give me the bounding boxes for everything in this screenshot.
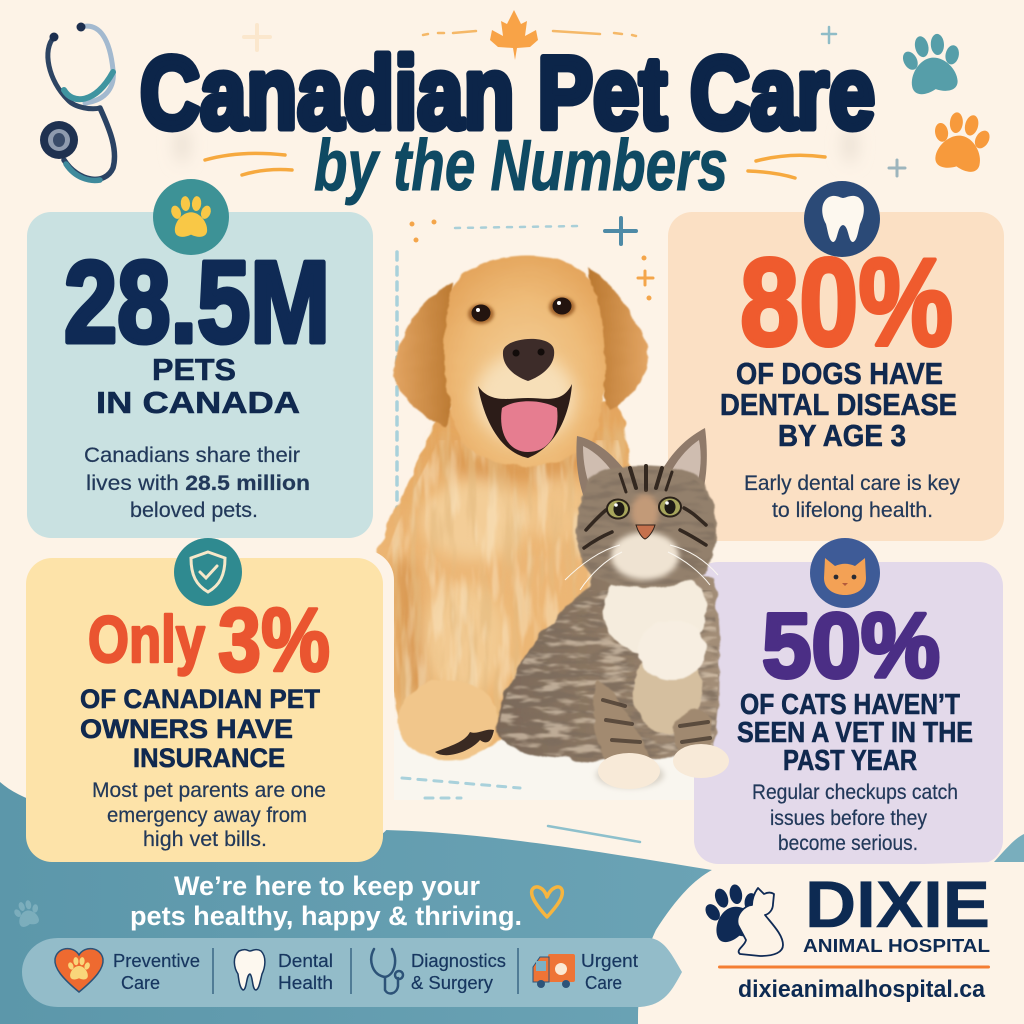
heading: pets in Canada: PETS [152,352,236,387]
icon: teal paw [898,30,966,97]
cat body tabby dark [499,590,718,758]
body text: to lifelong health. [772,499,933,522]
faint paw on teal [11,898,43,929]
cat body [497,560,720,760]
closing message: We’re here to keep your [174,871,480,901]
panel: only 3% insurance [26,538,394,862]
heading: dogs dental disease: DENTAL DISEASE [720,387,957,422]
cat muzzle [611,532,679,580]
icon: paw badge [153,179,229,255]
subtitle: by the Numbers [314,126,728,206]
icon: maple leaf [423,10,636,60]
logo rule [718,966,990,968]
cream logo background [638,862,1024,1024]
dog chest soft highlights [396,440,600,700]
body text [744,472,960,522]
dog fur streaks dark [376,400,632,735]
dog nose [503,339,554,381]
dog paw [398,680,498,760]
body text: Early dental care is key [744,472,960,495]
dog tongue [501,401,558,452]
heading: cats vet: OF CATS HAVEN’T [740,689,960,721]
soft title shadows [175,127,857,163]
dog left ear [393,283,456,426]
heading: dogs dental disease: BY AGE 3 [778,418,906,453]
stat: 28.5M: 28.5M [64,237,330,367]
icon: cat badge [810,538,880,608]
label [113,950,200,993]
dog right ear [588,266,648,410]
body text: high vet bills. [143,828,267,851]
stat: only 3%: Only [88,602,205,676]
cat ears [576,428,707,510]
icon: paw and cat logo [699,879,783,956]
stat: 50%: 50% [762,595,940,697]
body text: become serious. [778,832,918,855]
floor under pets [394,730,694,800]
icon: orange paw [926,108,995,175]
panel cream border [26,550,394,840]
closing message [130,871,522,931]
body text: beloved pets. [130,499,258,522]
dog eyes [468,297,575,324]
label: Urgent [581,950,638,971]
pill background [22,938,682,1007]
body text [84,444,310,522]
cat body tabby light [499,590,718,758]
cat head [576,466,717,588]
services pill [22,938,682,1007]
decorative subtitle swashes [205,153,825,178]
panel background [668,212,1004,541]
cat forehead stripes [584,466,706,548]
panel: 28.5M pets [27,179,373,538]
cat face centre [631,494,659,530]
panel: 80% dental disease [668,181,1004,541]
label: & Surgery [411,972,494,993]
cat paws [596,744,729,789]
logo panel [638,862,1024,1024]
label: Care [121,972,160,993]
cat whiskers [565,545,718,590]
illustration: tabby cat [497,428,729,789]
label: Dental [278,950,333,971]
panel: 50% cats vet [694,538,1003,864]
label [278,950,333,993]
heading: pet insurance: OWNERS HAVE [80,714,293,744]
decorative sparkles [244,25,905,842]
label [581,950,638,993]
stat: only 3% [88,591,330,691]
dog mouth [478,384,572,458]
body text: lives with 28.5 million [86,472,310,495]
body text: Most pet parents are one [92,779,326,802]
cat head tabby [578,470,715,586]
label: Care [585,972,622,993]
label: Preventive [113,950,200,971]
icon: heart outline [532,887,562,917]
service: preventive care [55,949,200,993]
body text [752,781,958,855]
panel background [27,212,373,538]
stat: 80%: 80% [740,234,953,372]
cat legs [594,680,712,770]
title: Canadian Pet Care [140,36,875,150]
dog muzzle [475,354,575,442]
heading: cats vet [737,689,973,777]
closing message: pets healthy, happy & thriving. [130,901,522,931]
stat: only 3%: 3% [218,591,330,691]
illustration: golden retriever [376,256,648,760]
logo name: DIXIE [805,867,990,941]
label: Diagnostics [411,950,506,971]
icon: tooth badge [804,181,880,257]
bottom teal wave [0,782,1024,1024]
body text: emergency away from [107,804,307,827]
cat chest [603,564,707,734]
heading: pet insurance: INSURANCE [133,743,285,773]
heading: cats vet: PAST YEAR [783,745,917,777]
body text [92,779,326,851]
icon: tooth [234,950,265,990]
logo subtitle: ANIMAL HOSPITAL [803,936,990,956]
website: dixieanimalhospital.ca [738,976,986,1003]
heading: pets in Canada: IN CANADA [96,385,300,420]
heading: dogs dental disease [720,356,957,453]
label: Health [278,972,333,993]
icon: ambulance [533,954,575,988]
cat leg stripes [603,700,710,742]
heading: pets in Canada [96,352,300,420]
service: urgent care [533,950,638,993]
heading: cats vet: SEEN A VET IN THE [737,717,973,749]
body text: Regular checkups catch [752,781,958,804]
heading: pet insurance: OF CANADIAN PET [80,684,320,714]
label [411,950,506,993]
dog head [445,256,605,466]
floor dashes [402,778,520,798]
icon: heart with paw [55,949,103,992]
icon: stethoscope [371,949,403,993]
dog fur streaks light [386,440,625,700]
body text: Canadians share their [84,444,300,467]
panel background [694,562,1003,864]
dog body [376,400,632,752]
icon: stethoscope [40,22,115,180]
dog nostrils [516,352,541,353]
cat nose [636,525,655,539]
service: dental health [234,950,333,993]
icon: shield badge [174,538,242,606]
body text: issues before they [770,807,927,830]
cat eyes [607,498,681,518]
panel background [26,558,383,862]
heading: pet insurance [80,684,320,773]
heading: dogs dental disease: OF DOGS HAVE [736,356,943,391]
service: diagnostics and surgery [371,949,506,993]
pill dividers [213,948,518,994]
